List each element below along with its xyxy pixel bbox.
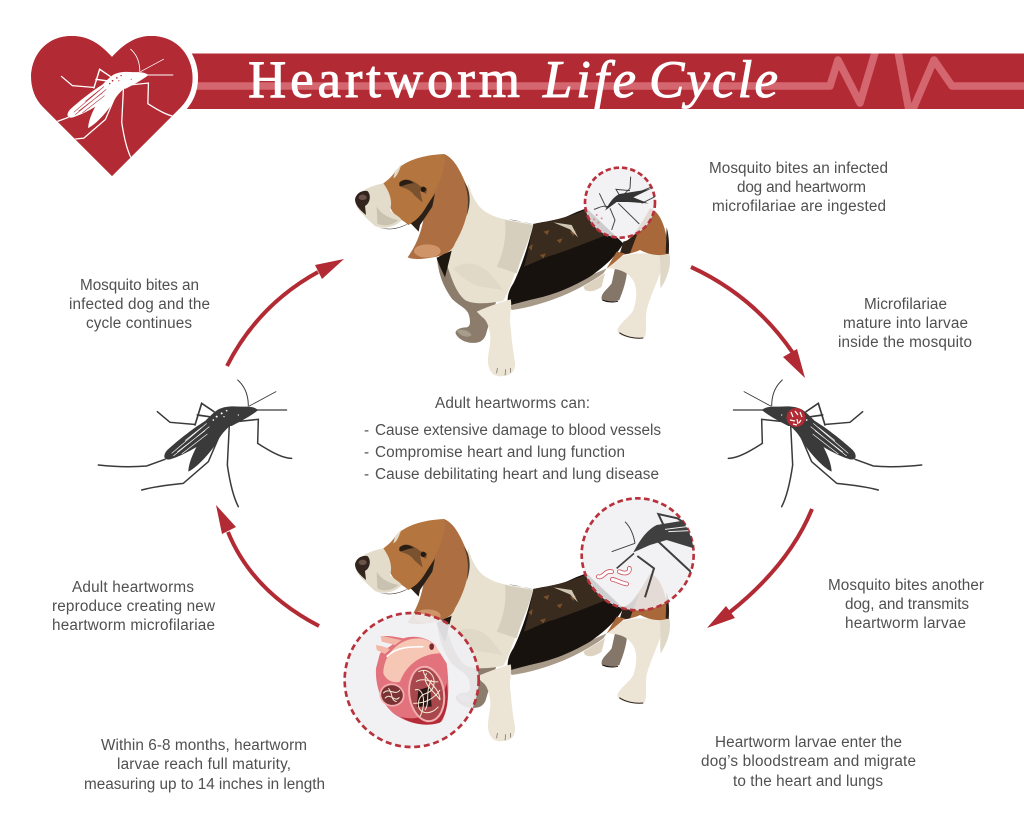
dog: bottom: [355, 519, 670, 741]
text: step 3: heartworm larvae: [845, 615, 966, 632]
title text: Life: [542, 51, 636, 109]
icon: heart with mosquito: [11, 36, 193, 176]
text: step 1: [709, 160, 888, 215]
text: step 2: Microfilariae: [864, 296, 947, 313]
text: step 3: Mosquito bites another: [828, 577, 984, 594]
text: step 4: dog’s bloodstream and migrate: [701, 753, 916, 770]
text: step 1: dog and heartworm: [737, 179, 866, 196]
text: step 5: Within 6-8 months, heartworm: [101, 737, 307, 754]
mosquito: left: [98, 380, 292, 507]
text: step 7: infected dog and the: [69, 296, 210, 313]
mosquito: right with larvae: [728, 380, 922, 507]
text: step 5: [84, 737, 325, 793]
text: adult heartworm effects: -: [364, 444, 369, 461]
title text: Cycle: [649, 51, 778, 109]
text: step 1: Mosquito bites an infected: [709, 160, 888, 177]
callout: mosquito transmitting larvae: [582, 498, 694, 610]
icon: heart cross-section: [376, 636, 448, 725]
text: step 5: larvae reach full maturity,: [117, 756, 291, 773]
heartbeat line: [196, 54, 1024, 109]
title banner: [186, 54, 1024, 109]
text: step 7: [69, 277, 210, 332]
text: step 7: cycle continues: [86, 315, 192, 332]
text: adult heartworm effects: Adult heartworms can:: [435, 395, 590, 412]
text: step 4: [701, 734, 916, 790]
text: adult heartworm effects: Cause debilitating heart and lung disease: [375, 466, 659, 483]
icon: larvae in mosquito: [786, 408, 806, 427]
title text: [248, 51, 778, 109]
text: step 7: Mosquito bites an: [80, 277, 199, 294]
text: adult heartworm effects: Cause extensive damage to blood vessels: [375, 422, 661, 439]
callout: mosquito biting dog: [585, 168, 655, 238]
title text: Heartworm: [248, 51, 520, 109]
text: step 6: Adult heartworms: [72, 579, 194, 596]
text: step 2: mature into larvae: [843, 315, 968, 332]
text: adult heartworm effects: -: [364, 466, 369, 483]
text: adult heartworm effects: Compromise heart and lung function: [375, 444, 625, 461]
text: step 6: heartworm microfilariae: [52, 617, 215, 634]
arrow: top left: [227, 259, 344, 366]
text: step 2: [838, 296, 972, 351]
text: step 5: measuring up to 14 inches in length: [84, 776, 325, 793]
arrow: bottom right: [707, 509, 812, 628]
text: step 2: inside the mosquito: [838, 334, 972, 351]
text: step 6: reproduce creating new: [52, 598, 216, 615]
text: step 1: microfilariae are ingested: [712, 198, 886, 215]
text: step 6: [52, 579, 216, 634]
arrow: top right: [691, 267, 805, 378]
dog: top: [355, 154, 670, 376]
text: step 3: [828, 577, 984, 632]
text: adult heartworm effects: -: [364, 422, 369, 439]
arrow: bottom left: [216, 505, 319, 626]
text: step 3: dog, and transmits: [845, 596, 969, 613]
text: step 4: to the heart and lungs: [733, 773, 883, 790]
text: adult heartworm effects: [364, 395, 661, 483]
banner stripe: [170, 54, 1024, 109]
callout: heart with adult worms: [345, 613, 479, 747]
text: step 4: Heartworm larvae enter the: [715, 734, 902, 751]
